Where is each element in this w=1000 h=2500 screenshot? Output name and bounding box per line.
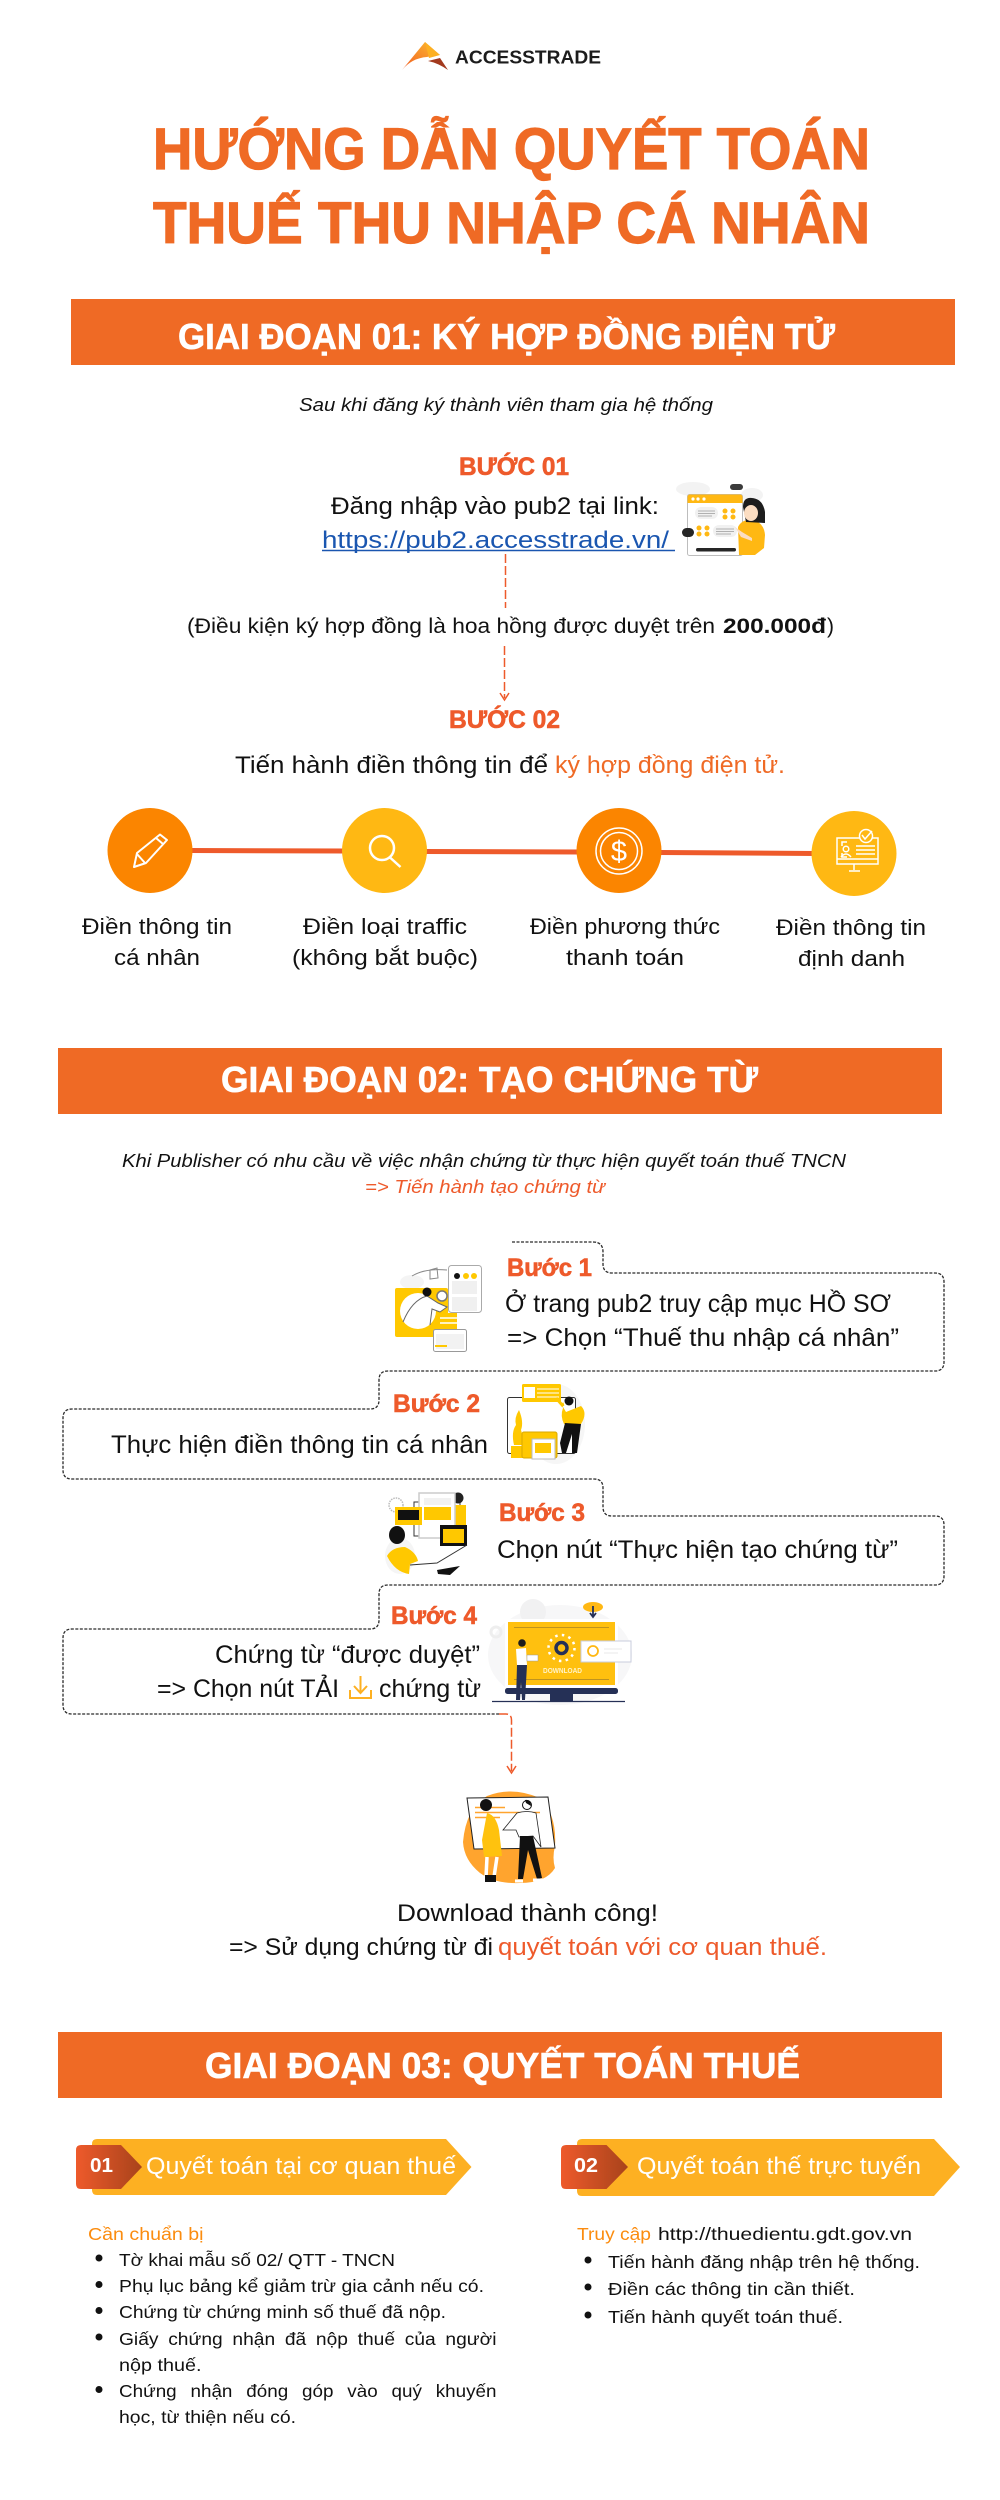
step 1 block: => Chọn “Thuế thu nhập cá nhân” (507, 1324, 899, 1352)
ribbon: online settlement: 02 (574, 2155, 598, 2177)
ribbon: offline settlement (76, 2139, 472, 2195)
logo: Accesstrade: ACCESSTRADE (455, 46, 601, 68)
step label: identity: định danh (798, 946, 905, 971)
illustration: step 3 person at screens (385, 1492, 467, 1575)
illustration: step 4 download monitor: DOWNLOAD (543, 1666, 582, 1675)
step 2 block: Thực hiện điền thông tin cá nhân (111, 1431, 488, 1459)
title: HƯỚNG DẪN QUYẾT TOÁN (153, 117, 870, 182)
arrow: step 4 to download success (499, 1714, 516, 1773)
step 02 heading: BƯỚC 02 (449, 704, 560, 734)
step label: identity: Điền thông tin (776, 915, 926, 940)
ribbon: offline settlement: Quyết toán tại cơ quan thuế (146, 2153, 457, 2180)
step label: personal info (82, 914, 232, 970)
dashed process outline (63, 1242, 944, 1714)
step 02 description (235, 752, 785, 779)
arrow: dashed line to step 02 (500, 646, 509, 700)
icon: dollar circle (576, 808, 662, 893)
icon: woman with web page (676, 482, 765, 556)
right column: online steps: Tiến hành quyết toán thuế. (608, 2307, 843, 2327)
panel: stage 01 banner: GIAI ĐOẠN 01: KÝ HỢP ĐỒNG ĐIỆN TỬ (178, 315, 835, 357)
step 4 block: Chứng từ “được duyệt” (215, 1641, 480, 1669)
success message: Download thành công! (397, 1900, 658, 1927)
left column: preparation checklist: nộp thuế. (119, 2355, 202, 2375)
step label: traffic type: Điền loại traffic (303, 914, 467, 939)
condition text: 200.000đ (723, 615, 826, 638)
left column: preparation checklist: Chứng nhận đóng góp vào quý khuyến (119, 2381, 496, 2401)
condition text: ) (827, 615, 834, 638)
step 1 block: Bước 1 (507, 1254, 592, 1282)
step label: payment method: thanh toán (566, 945, 684, 970)
illustration: step 4 download monitor (488, 1599, 632, 1705)
step label: traffic type (292, 914, 478, 970)
step 1 block (505, 1254, 899, 1352)
icon: pencil circle (108, 808, 192, 893)
timeline connector (190, 850, 815, 854)
ribbon: online settlement (561, 2139, 960, 2196)
panel: stage 02 banner: GIAI ĐOẠN 02: TẠO CHỨNG TỪ (221, 1058, 758, 1100)
step 02 description: ký hợp đồng điện tử. (555, 752, 785, 779)
step 3 block: Bước 3 (499, 1499, 585, 1527)
step 01 heading: BƯỚC 01 (459, 451, 569, 481)
title: THUẾ THU NHẬP CÁ NHÂN (153, 191, 870, 256)
step label: personal info: Điền thông tin (82, 914, 232, 939)
condition text: (Điều kiện ký hợp đồng là hoa hồng được duyệt trên (187, 615, 715, 638)
step 01 text and link: Đăng nhập vào pub2 tại link: (331, 493, 659, 520)
step 4 block (157, 1602, 481, 1703)
left column: preparation checklist: Phụ lục bảng kể giảm trừ gia cảnh nếu có. (119, 2276, 484, 2296)
illustration: two people at board (463, 1791, 555, 1883)
stage 02 intro text: => Tiến hành tạo chứng từ (365, 1176, 606, 1197)
stage 01 intro text: Sau khi đăng ký thành viên tham gia hệ thống (299, 394, 714, 415)
right column: online steps: http://thuedientu.gdt.gov.vn (658, 2224, 912, 2244)
step label: traffic type: (không bắt buộc) (292, 945, 478, 970)
step 01 text and link: https://pub2.accesstrade.vn/ (322, 527, 669, 554)
step 01 text and link (322, 493, 675, 554)
logo: Accesstrade (402, 42, 601, 70)
ribbon: online settlement: Quyết toán thế trực tuyến (637, 2153, 921, 2180)
panel: stage 03 banner: GIAI ĐOẠN 03: QUYẾT TOÁN THUẾ (205, 2045, 800, 2086)
left column: preparation checklist: Giấy chứng nhận đã nộp thuế của người (119, 2329, 496, 2349)
panel: stage 02 banner (58, 1048, 942, 1114)
step 3 block: Chọn nút “Thực hiện tạo chứng từ” (497, 1536, 898, 1564)
illustration: step 1 designer at screen (395, 1266, 482, 1352)
right column: online steps (577, 2224, 920, 2327)
title (153, 117, 870, 256)
step 02 description: Tiến hành điền thông tin để (235, 752, 548, 779)
success message: => Sử dụng chứng từ đi (229, 1934, 493, 1961)
success message: quyết toán với cơ quan thuế. (498, 1934, 827, 1961)
right column: online steps: Truy cập (577, 2224, 651, 2244)
step 2 block: Bước 2 (393, 1390, 480, 1418)
stage 02 intro text (122, 1150, 847, 1197)
icon: search circle (342, 808, 427, 893)
icon: dollar circle: $ (611, 836, 627, 868)
arrow: dashed line from step 01 to condition (504, 554, 506, 608)
illustration: step 2 person at dashboard (508, 1384, 585, 1464)
left column: preparation checklist: học, từ thiện nếu có. (119, 2407, 296, 2427)
ribbon: offline settlement: 01 (90, 2155, 113, 2177)
left column: preparation checklist (88, 2224, 496, 2427)
step label: identity (776, 915, 926, 971)
step label: personal info: cá nhân (114, 945, 200, 970)
success message (229, 1900, 827, 1961)
icon: download arrow (350, 1676, 371, 1698)
step label: payment method: Điền phương thức (530, 914, 720, 939)
step 4 block: chứng từ (379, 1675, 481, 1703)
step 1 block: Ở trang pub2 truy cập mục HỒ SƠ (505, 1288, 891, 1318)
step 3 block (497, 1499, 898, 1564)
right column: online steps: Điền các thông tin cần thiết. (608, 2279, 855, 2299)
step 4 block: => Chọn nút TẢI (157, 1673, 339, 1703)
left column: preparation checklist: Chứng từ chứng minh số thuế đã nộp. (119, 2302, 446, 2322)
left column: preparation checklist: Tờ khai mẫu số 02/ QTT - TNCN (119, 2249, 395, 2270)
panel: stage 03 banner (58, 2032, 942, 2098)
step label: payment method (530, 914, 720, 970)
stage 02 intro text: Khi Publisher có nhu cầu về việc nhận chứng từ thực hiện quyết toán thuế TNCN (122, 1150, 847, 1171)
right column: online steps: Tiến hành đăng nhập trên hệ thống. (608, 2252, 920, 2272)
panel: stage 01 banner (71, 299, 955, 365)
step 2 block (111, 1390, 488, 1459)
left column: preparation checklist: Cần chuẩn bị (88, 2224, 204, 2244)
icon: identity monitor circle (812, 811, 896, 896)
step 4 block: Bước 4 (391, 1602, 477, 1630)
